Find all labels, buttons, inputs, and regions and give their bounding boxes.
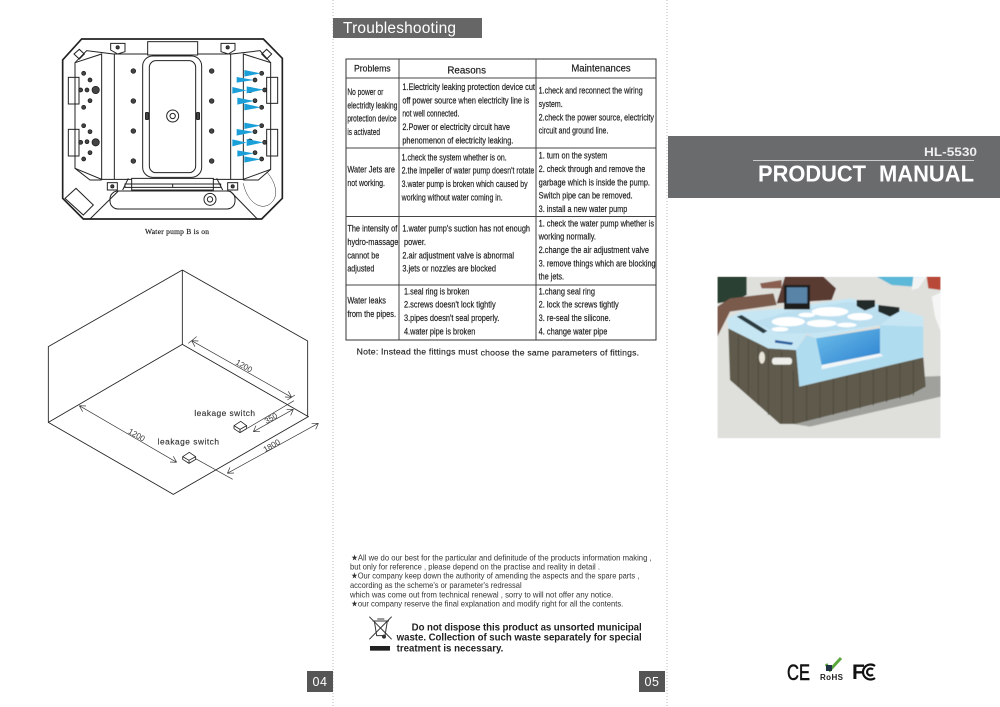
waste disposal warning: treatment is necessary. <box>397 643 504 654</box>
disclaimer text <box>349 552 652 609</box>
table text: rows 3-4: from the pipes. <box>347 309 396 319</box>
page number 04 <box>307 671 333 692</box>
page number 05: 05 <box>645 675 659 689</box>
table text: header and rows 1-2: 2.the impeller of water pump doesn't rotate <box>402 166 534 176</box>
page number 05 <box>639 671 665 692</box>
table text: rows 3-4: adjusted <box>347 264 374 274</box>
table text: rows 3-4: the jets. <box>539 272 564 282</box>
disclaimer text: according as the scheme's or parameter's redressal <box>350 580 522 590</box>
table text: header and rows 1-2: 1. turn on the system <box>539 151 607 161</box>
table text: header and rows 1-2: No power or <box>347 87 383 97</box>
table text: header and rows 1-2: 3. install a new water pump <box>539 204 627 214</box>
table text: header and rows 1-2: 1.check the system whether is on. <box>402 152 507 162</box>
waste disposal warning: waste. Collection of such waste separately for special <box>396 633 642 644</box>
table text: header and rows 1-2: 1.check and reconnect the wiring <box>539 86 643 96</box>
heading: Troubleshooting: Troubleshooting <box>343 20 456 37</box>
title: product manual: MANUAL <box>879 160 974 186</box>
table text: rows 3-4: 4.water pipe is broken <box>404 326 475 336</box>
table text: header and rows 1-2: Water Jets are <box>347 165 395 175</box>
table text: rows 3-4: 3.pipes doesn't seal properly. <box>404 313 499 323</box>
table text: rows 3-4: 2.change the air adjustment valve <box>539 245 649 255</box>
label: dimension 1800: 1800 <box>262 437 282 454</box>
table text: header and rows 1-2: not well connected. <box>402 109 459 119</box>
caption: water pump B is on: Water pump B is on <box>145 227 209 236</box>
table text: header and rows 1-2 <box>347 64 654 214</box>
table text: header and rows 1-2: 1.Electricity leaking protection device cut <box>402 82 535 92</box>
table text: header and rows 1-2: is activated <box>347 127 380 137</box>
disclaimer text: ★Our company keep down the authority of amending the aspects and the spare parts , <box>351 571 639 581</box>
disclaimer text: ★our company reserve the final explanation and modify right for all the contents. <box>351 599 623 609</box>
table text: rows 3-4: 3. remove things which are blocking <box>539 258 656 268</box>
table text: header and rows 1-2: Reasons <box>447 65 486 76</box>
table text: rows 3-4: 2.air adjustment valve is abnormal <box>402 250 514 260</box>
table text: header and rows 1-2: electridty leaking <box>347 100 397 110</box>
heading: Troubleshooting <box>333 18 482 38</box>
table text: rows 3-4: 3.jets or nozzles are blocked <box>402 264 496 274</box>
table text: rows 3-4: cannot be <box>347 250 379 260</box>
table text: header and rows 1-2: off power source when electricity line is <box>402 95 530 105</box>
table text: header and rows 1-2: Maintenances <box>571 64 631 75</box>
table text: header and rows 1-2: not working. <box>347 178 385 188</box>
diagram: room installation dimensions <box>48 270 318 494</box>
table text: rows 3-4: The intensity of <box>347 224 398 234</box>
icon: crossed-out wheelie bin <box>369 617 392 651</box>
waste disposal warning: Do not dispose this product as unsorted municipal <box>412 622 642 633</box>
note about fittings: Note: Instead the fittings must <box>357 346 478 356</box>
label: dimension 1200 upper: 1200 <box>234 358 254 375</box>
table text: rows 3-4: power. <box>404 237 426 247</box>
title: product manual <box>758 160 974 186</box>
page number 04: 04 <box>313 675 327 689</box>
table text: rows 3-4: 1. check the water pump whether is <box>539 218 654 228</box>
table text: rows 3-4: 2. lock the screws tightly <box>539 300 619 310</box>
table text: rows 3-4: 1.seal ring is broken <box>404 286 469 296</box>
table text: rows 3-4: hydro-massage <box>347 237 398 247</box>
waste disposal warning <box>396 622 642 654</box>
table text: header and rows 1-2: 2. check through and remove the <box>539 164 645 174</box>
table text: rows 3-4: working normally. <box>538 232 596 242</box>
label: leakage switch lower: leakage switch <box>158 437 219 447</box>
model number: HL-5530 <box>924 145 977 159</box>
table text: rows 3-4: 3. re-seal the silicone. <box>539 313 611 323</box>
table text: header and rows 1-2: protection device <box>347 114 397 124</box>
logo: FC: F <box>852 661 865 684</box>
logo: RoHS: RoHS <box>820 673 844 682</box>
table text: header and rows 1-2: 3.water pump is broken which caused by <box>402 179 528 189</box>
table text: header and rows 1-2: 2.Power or electricity circuit have <box>402 122 510 132</box>
table text: header and rows 1-2: Problems <box>354 64 391 74</box>
table text: rows 3-4: 2.screws doesn't lock tightly <box>404 300 496 310</box>
table text: header and rows 1-2: circuit and ground line. <box>539 126 608 136</box>
table text: rows 3-4: 1.water pump's suction has not enough <box>402 224 530 234</box>
certification logos <box>787 658 875 685</box>
disclaimer text: ★All we do our best for the particular and definitude of the products information making , <box>351 552 652 562</box>
note about fittings <box>357 346 639 358</box>
label: leakage switch upper: leakage switch <box>194 408 255 418</box>
table text: header and rows 1-2: working without water coming in. <box>401 192 503 202</box>
table: troubleshooting <box>346 59 656 340</box>
table text: header and rows 1-2: garbage which is inside the pump. <box>539 177 650 187</box>
table text: rows 3-4: 4. change water pipe <box>539 326 607 336</box>
icon: leakage switch lower <box>183 452 196 463</box>
diagram: spa top view with pump B jets <box>63 39 282 219</box>
note about fittings: choose the same parameters of fittings. <box>481 348 639 358</box>
icon: leakage switch upper <box>234 421 247 433</box>
label: dimension 350: 350 <box>263 411 280 426</box>
table text: rows 3-4 <box>347 218 656 336</box>
table text: header and rows 1-2: 2.check the power source, electricity <box>539 112 654 122</box>
title: product manual: PRODUCT <box>758 160 866 186</box>
disclaimer text: which was come out from technical renewal , sorry to will not offer any notice. <box>349 589 613 599</box>
photo: hot tub with TV <box>717 277 941 438</box>
icon: blue water jets <box>232 70 263 163</box>
table text: header and rows 1-2: Switch pipe can be removed. <box>539 191 633 201</box>
title banner <box>668 136 1000 198</box>
table text: header and rows 1-2: phenomenon of electricity leaking. <box>402 135 513 145</box>
table text: header and rows 1-2: system. <box>539 99 563 109</box>
table text: rows 3-4: 1.chang seal ring <box>539 286 595 296</box>
logo: CE: CE <box>787 660 810 685</box>
disclaimer text: but only for reference , please depend on the practise and reality in detail . <box>350 562 600 572</box>
table text: rows 3-4: Water leaks <box>347 296 386 306</box>
label: dimension 1200 lower: 1200 <box>127 427 147 444</box>
